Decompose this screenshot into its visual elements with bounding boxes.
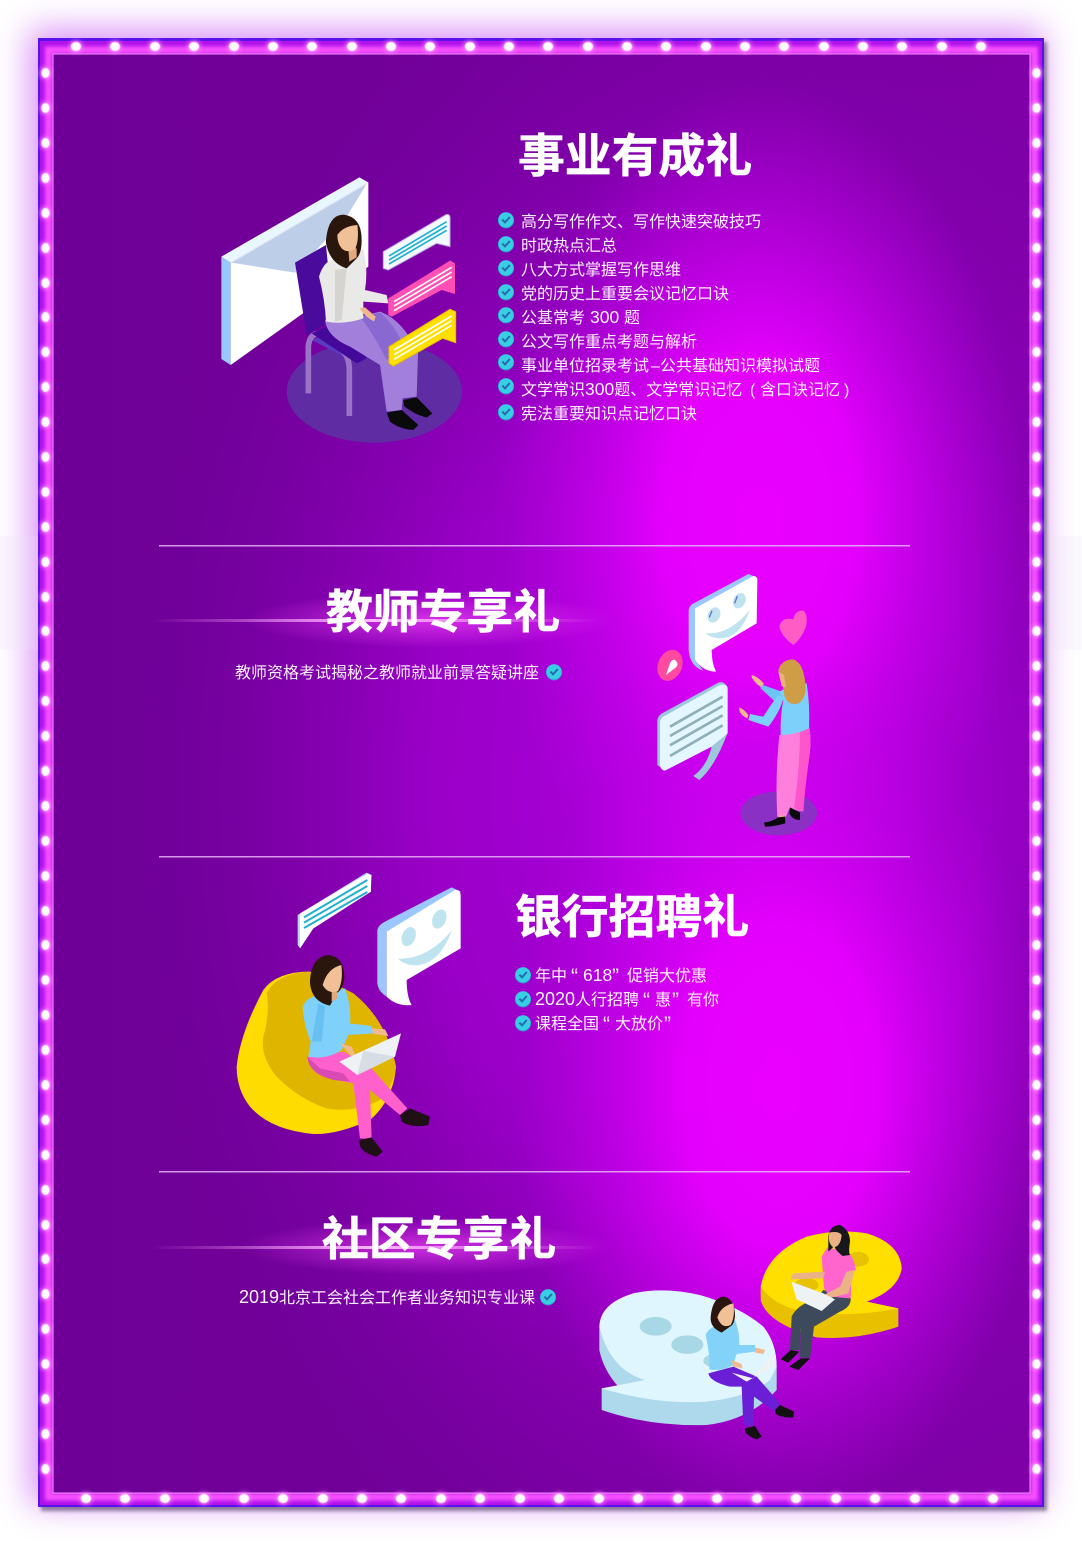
heading: teacher gift: 教师专享礼 — [326, 576, 560, 642]
checklist: bank recruitment gift: ” — [672, 989, 679, 1012]
checklist: bank recruitment gift: 2020 — [535, 989, 575, 1009]
panel: career gift — [221, 120, 849, 443]
checklist: career gift — [498, 212, 849, 423]
light streak — [150, 592, 615, 648]
checklist: bank recruitment gift: 大放价 — [615, 1015, 663, 1033]
checklist: career gift: 公基常考 — [521, 310, 585, 327]
checklist: career gift: 八大方式掌握写作思维 — [521, 261, 681, 279]
text: community gift item: 北京工会社会工作者业务知识专业课 — [279, 1289, 535, 1307]
text: community gift item — [239, 1287, 556, 1307]
checklist: career gift: 事业单位招录考试 — [521, 358, 649, 375]
checklist: bank recruitment gift: 人行招聘 — [575, 991, 639, 1009]
panel: bank recruitment gift — [237, 873, 749, 1157]
checklist: bank recruitment gift: 课程全国 — [535, 1016, 599, 1033]
checklist: career gift: 文学常识300题、文学常识记忆 — [521, 379, 742, 399]
checklist: career gift: 300 — [590, 307, 619, 327]
heading: career gift: 事业有成礼 — [518, 120, 752, 186]
checklist: career gift: – — [651, 358, 660, 375]
panel: community gift — [150, 1203, 902, 1439]
checklist: career gift: 时政热点汇总 — [521, 237, 617, 255]
checklist: bank recruitment gift — [515, 965, 719, 1036]
checklist: bank recruitment gift: 惠 — [655, 991, 671, 1009]
panel: teacher gift — [150, 574, 817, 835]
checklist: career gift: 宪法重要知识点记忆口诀 — [521, 405, 697, 423]
checklist: bank recruitment gift: 促销大优惠 — [627, 967, 707, 985]
checklist: career gift: 党的历史上重要会议记忆口诀 — [521, 285, 729, 303]
illustration: woman on beanbag with laptop — [237, 873, 461, 1157]
checklist: career gift: 公文写作重点考题与解析 — [521, 333, 697, 351]
checklist: bank recruitment gift: ” — [664, 1013, 671, 1036]
illustration: woman on chair with envelope and chat bubbles — [221, 177, 462, 443]
checklist: bank recruitment gift: 有你 — [687, 991, 719, 1009]
checklist: bank recruitment gift: “ — [571, 965, 578, 988]
light streak — [150, 1219, 610, 1275]
illustration: two women on speech bubbles — [599, 1225, 902, 1439]
checklist: career gift: 高分写作作文、写作快速突破技巧 — [521, 213, 761, 231]
checklist: bank recruitment gift: “ — [603, 1013, 610, 1036]
text: teacher gift item: 教师资格考试揭秘之教师就业前景答疑讲座 — [235, 664, 539, 682]
checklist: bank recruitment gift: ” — [612, 965, 619, 988]
checklist: bank recruitment gift: “ — [643, 989, 650, 1012]
illustration: woman with chat bubbles — [653, 574, 817, 835]
checklist: career gift: 含口诀记忆 — [760, 381, 840, 399]
checklist: career gift: 题 — [624, 310, 640, 327]
checklist: bank recruitment gift: 年中 — [535, 968, 567, 985]
checklist: career gift: ( — [750, 382, 756, 399]
text: community gift item: 2019 — [239, 1287, 279, 1307]
checklist: career gift: ) — [844, 382, 849, 399]
checklist: career gift: 公共基础知识模拟试题 — [660, 357, 820, 375]
heading: community gift: 社区专享礼 — [322, 1203, 556, 1269]
heading: bank recruitment gift: 银行招聘礼 — [515, 881, 749, 947]
checklist: bank recruitment gift: 618 — [583, 965, 612, 985]
